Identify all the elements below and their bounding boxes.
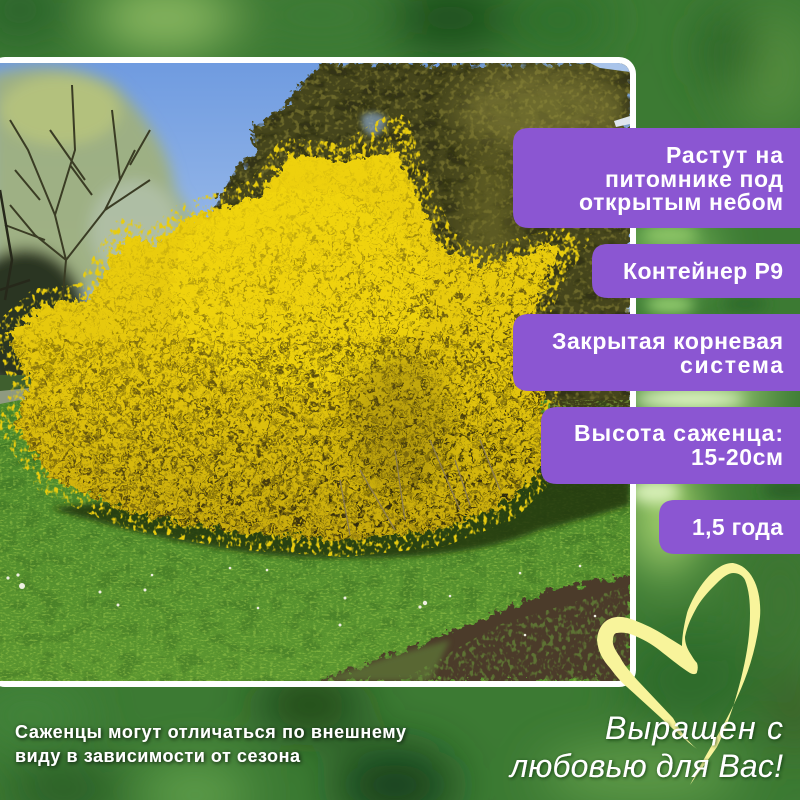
forsythia bush bbox=[0, 120, 600, 550]
label: container bbox=[592, 244, 800, 298]
label: seedling height: 15-20см bbox=[691, 444, 783, 470]
daisies on lawn bbox=[6, 565, 596, 636]
slogan text: любовью для Вас! bbox=[508, 748, 783, 784]
sky gap in conifer bbox=[362, 112, 385, 136]
soil path bbox=[318, 575, 630, 681]
label: container: Контейнер Р9 bbox=[623, 258, 783, 284]
label: age bbox=[659, 500, 800, 554]
label: root system bbox=[513, 314, 800, 391]
label: growing conditions: Растут на bbox=[666, 142, 783, 168]
conifer bbox=[212, 63, 630, 400]
panel: photo of forsythia bush in white frame bbox=[0, 57, 636, 687]
disclaimer text: виду в зависимости от сезона bbox=[15, 746, 301, 766]
label: seedling height: Высота саженца: bbox=[574, 420, 783, 446]
slogan text: Выращен с bbox=[605, 710, 783, 746]
slogan text bbox=[508, 710, 783, 784]
dark hollow in bush bbox=[350, 350, 450, 490]
label: growing conditions: питомнике под bbox=[605, 166, 783, 192]
label: root system: система bbox=[680, 352, 783, 378]
photo frame bbox=[0, 57, 636, 687]
panel: characteristic labels bbox=[513, 128, 800, 554]
disclaimer text bbox=[15, 722, 406, 766]
bush shadow on lawn bbox=[50, 450, 630, 558]
label: root system: Закрытая корневая bbox=[552, 328, 783, 354]
disclaimer text: Саженцы могут отличаться по внешнему bbox=[15, 722, 406, 742]
label: growing conditions bbox=[513, 128, 800, 228]
left trees bbox=[0, 67, 200, 392]
scattered flowers around the outline bbox=[8, 130, 560, 540]
icon: hand-drawn yellow heart bbox=[597, 563, 760, 785]
label: age: 1,5 года bbox=[692, 514, 783, 540]
sky bbox=[0, 63, 630, 403]
photo scene bbox=[0, 63, 630, 681]
stems at base bbox=[340, 440, 500, 535]
label: growing conditions: открытым небом bbox=[579, 189, 783, 215]
light bands between labels bbox=[630, 228, 800, 504]
lawn bbox=[0, 375, 630, 681]
bush body bbox=[4, 148, 558, 544]
label: seedling height bbox=[541, 407, 800, 484]
